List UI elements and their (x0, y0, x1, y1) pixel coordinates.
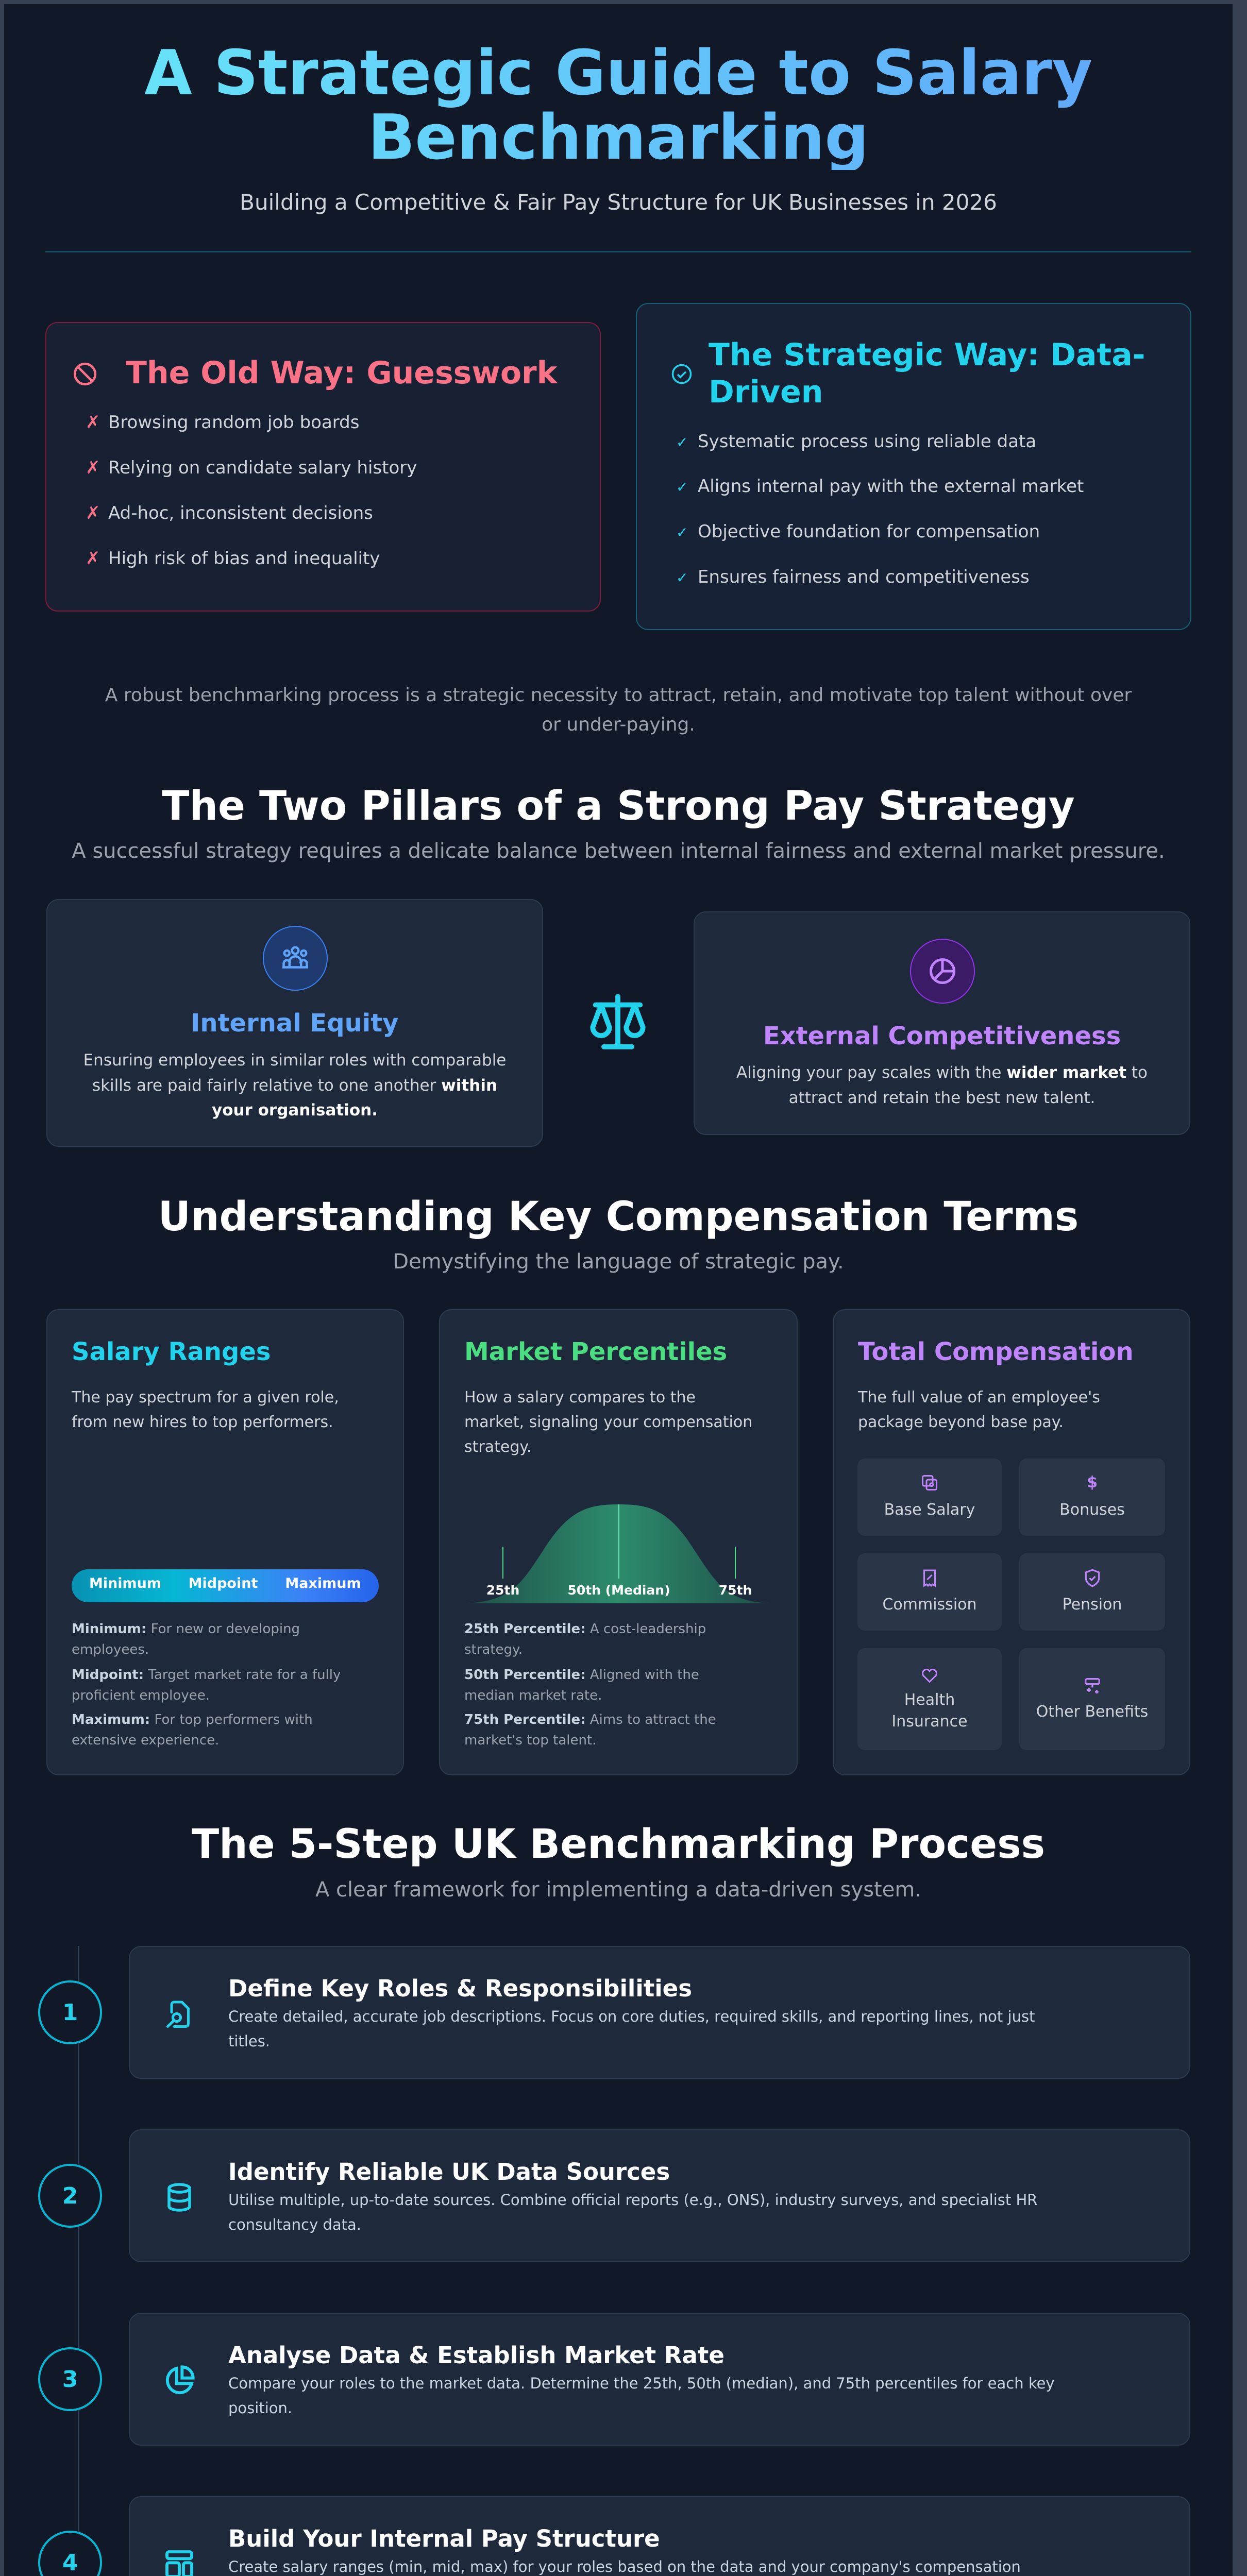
step 1: titles. (228, 2032, 270, 2050)
panel: external competitiveness (694, 911, 1190, 1135)
title: total compensation: Total Compensation (858, 1337, 1134, 1366)
heading: 5-step process: The 5-Step UK Benchmarking Process (192, 1821, 1045, 1868)
heading: old way: The Old Way: Guesswork (126, 355, 558, 391)
icon: pie (910, 939, 975, 1004)
text: percentile definitions: 25th Percentile: A cost-leadership (464, 1621, 706, 1637)
list: strategic items: Ensures fairness and competitiveness (698, 567, 1030, 587)
heading: strategic way (672, 337, 1145, 410)
tile: bonuses (1019, 1459, 1165, 1536)
icon: people (263, 926, 328, 991)
step 4: Build Your Internal Pay Structure (228, 2525, 660, 2552)
icon: ban (73, 363, 97, 385)
step 2 (38, 2129, 1190, 2262)
text: range definitions: employees. Midpoint: Target market rate for a fully (72, 1642, 341, 1683)
icon: file search (166, 2001, 190, 2028)
tile: health insurance: Health (904, 1691, 955, 1709)
text: percentile definitions (464, 1621, 716, 1748)
text: salary ranges: from new hires to top performers. (72, 1413, 333, 1431)
number 2 (38, 2164, 102, 2228)
text: salary ranges (71, 1388, 339, 1431)
chart: bell curve: 25th (486, 1583, 519, 1598)
tile: pension: Pension (1063, 1596, 1122, 1614)
number 3: 3 (62, 2366, 78, 2393)
text: percentile definitions: strategy. 50th Percentile: Aligned with the (464, 1642, 699, 1683)
list: old way items: ✗ (86, 503, 100, 523)
list: strategic items: Aligns internal pay with the external market (698, 476, 1084, 497)
list: strategic items: Systematic process using reliable data (698, 431, 1036, 452)
text: percentile definitions: median market rate. 75th Percentile: Aims to attract the (464, 1688, 716, 1727)
step 3 (38, 2313, 1190, 2446)
panel: total compensation (833, 1309, 1190, 1775)
step 1 (38, 1946, 1190, 2079)
icon: circle check (672, 364, 692, 384)
tile: bonuses: $ (1087, 1473, 1098, 1492)
panel: salary ranges (46, 1309, 404, 1775)
title: salary ranges: Salary Ranges (72, 1337, 271, 1366)
number 1 (38, 1980, 102, 2044)
list: strategic items: ✓ (676, 434, 688, 451)
text: internal equity: skills are paid fairly relative to one another within (92, 1076, 497, 1094)
tile: commission (857, 1553, 1002, 1631)
step 1: Create detailed, accurate job descriptions. Focus on core duties, required skills, and reporting lines, not just (228, 2008, 1035, 2025)
tile: base salary (857, 1459, 1002, 1536)
number 4 (38, 2531, 102, 2576)
text: range definitions: extensive experience. (72, 1733, 219, 1748)
chart: salary bar (72, 1569, 379, 1602)
heading: key terms: Understanding Key Compensation Terms (158, 1194, 1079, 1240)
intro paragraph: or under-paying. (542, 714, 695, 735)
step 3: Analyse Data & Establish Market Rate (228, 2342, 724, 2369)
title: A Strategic Guide to Salary (144, 38, 1092, 109)
panel: market percentiles (439, 1309, 798, 1775)
text: range definitions (72, 1621, 341, 1748)
text: total compensation: package beyond base pay. (858, 1413, 1064, 1431)
text: internal equity: your organisation. (212, 1101, 378, 1120)
step 4: Create salary ranges (min, mid, max) for your roles based on the data and your company's compensation (228, 2558, 1021, 2575)
title: market percentiles: Market Percentiles (464, 1337, 727, 1366)
title: internal equity: Internal Equity (191, 1009, 398, 1038)
list: old way items: Ad-hoc, inconsistent decisions (108, 503, 373, 523)
list: old way items: ✗ (86, 412, 100, 433)
chart: bell curve: 75th (719, 1583, 752, 1598)
step 1: Define Key Roles & Responsibilities (228, 1975, 692, 2002)
tile: health insurance: Insurance (891, 1713, 968, 1731)
list: old way items (86, 412, 417, 569)
step 2: Identify Reliable UK Data Sources (228, 2158, 670, 2185)
number 1: 1 (62, 1999, 78, 2026)
step 2: Utilise multiple, up-to-date sources. Combine official reports (e.g., ONS), industry surveys, and specialist HR (228, 2191, 1037, 2209)
step 3: position. (228, 2399, 292, 2417)
list: old way items: Relying on candidate salary history (108, 457, 417, 478)
chart: bell curve (468, 1504, 768, 1603)
icon: layout (165, 2550, 193, 2576)
text: salary ranges: The pay spectrum for a given role, (72, 1388, 339, 1406)
heading: strategic way: The Strategic Way: Data- (709, 337, 1145, 373)
tile: health insurance (857, 1648, 1002, 1750)
text: external competitiveness: Aligning your pay scales with the wider market to (736, 1063, 1148, 1082)
icon: scales (590, 994, 646, 1049)
chart: salary bar: Maximum (285, 1575, 361, 1591)
subtitle: Building a Competitive & Fair Pay Structure for UK Businesses in 2026 (240, 190, 997, 215)
text: internal equity: Ensuring employees in similar roles with comparable (83, 1051, 506, 1070)
text: range definitions: Minimum: For new or developing (72, 1621, 300, 1637)
heading: strategic way: Driven (709, 374, 823, 410)
title: external competitiveness: External Competitiveness (763, 1022, 1121, 1050)
tile: other benefits (1019, 1648, 1165, 1750)
list: old way items: Browsing random job boards (108, 412, 359, 433)
panel: strategic way (636, 303, 1191, 630)
intro paragraph: A robust benchmarking process is a strategic necessity to attract, retain, and motivate top talent without over (105, 685, 1132, 706)
number 4: 4 (62, 2549, 78, 2576)
text: market percentiles: strategy. (464, 1438, 531, 1456)
number 3 (38, 2347, 102, 2411)
panel: old way (45, 322, 601, 612)
list: strategic items (676, 431, 1084, 587)
number 2: 2 (62, 2182, 78, 2209)
step 3: Compare your roles to the market data. Determine the 25th, 50th (median), and 75th percentiles for each key (228, 2375, 1055, 2392)
chart: bell curve: 50th (Median) (567, 1583, 670, 1598)
icon: database (167, 2183, 191, 2212)
title (45, 41, 1191, 170)
subheading: 5-step process: A clear framework for implementing a data-driven system. (315, 1878, 921, 1902)
text: total compensation: The full value of an employee's (858, 1388, 1100, 1406)
list: strategic items: Objective foundation for compensation (698, 521, 1040, 542)
list: old way items: ✗ (86, 548, 100, 569)
text: internal equity (83, 1051, 506, 1120)
list: strategic items: ✓ (676, 524, 688, 541)
heading: two pillars: The Two Pillars of a Strong Pay Strategy (162, 783, 1075, 829)
text: percentile definitions: market's top talent. (464, 1733, 596, 1748)
text: market percentiles: market, signaling your compensation (464, 1413, 752, 1431)
tile: bonuses: Bonuses (1059, 1501, 1125, 1519)
tile: other benefits: Other Benefits (1036, 1703, 1148, 1721)
panel: internal equity (46, 899, 543, 1147)
text: external competitiveness (736, 1063, 1148, 1107)
text: external competitiveness: attract and retain the best new talent. (789, 1089, 1095, 1107)
tile: base salary: Base Salary (884, 1501, 975, 1519)
chart: salary bar: Midpoint (189, 1575, 258, 1591)
tile: commission: Commission (882, 1596, 977, 1614)
step 2: consultancy data. (228, 2216, 361, 2233)
chart: salary bar: Minimum (89, 1575, 161, 1591)
step 4 (38, 2496, 1190, 2576)
text: range definitions: proficient employee. Maximum: For top performers with (72, 1688, 313, 1727)
text: market percentiles: How a salary compares to the (464, 1388, 696, 1406)
text: market percentiles (464, 1388, 752, 1456)
subheading: two pillars: A successful strategy requires a delicate balance between internal fairness and external market pressure. (72, 839, 1165, 863)
list: old way items: High risk of bias and inequality (108, 548, 380, 569)
subheading: key terms: Demystifying the language of strategic pay. (393, 1250, 844, 1274)
tile: pension (1019, 1553, 1165, 1631)
list: strategic items: ✓ (676, 479, 688, 496)
text: total compensation (857, 1388, 1100, 1431)
intro paragraph (105, 685, 1132, 735)
list: old way items: ✗ (86, 457, 100, 478)
title: Benchmarking (368, 102, 869, 174)
icon: pie chart (166, 2365, 195, 2395)
list: strategic items: ✓ (676, 569, 688, 586)
